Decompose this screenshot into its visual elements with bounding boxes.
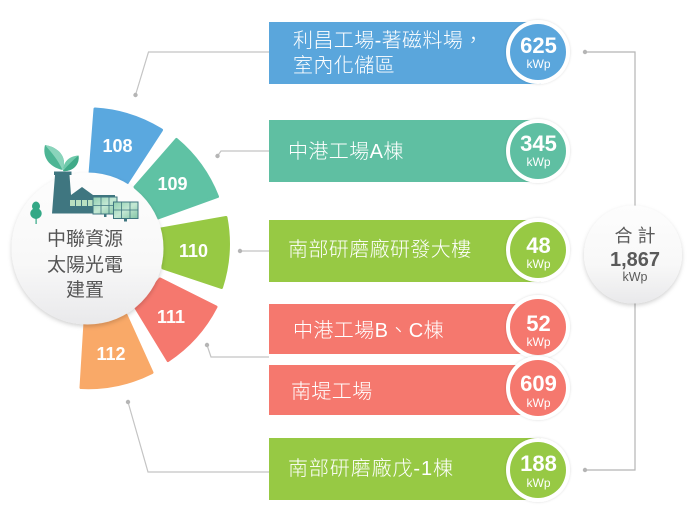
disc title: 建置: [66, 279, 104, 301]
segment: 111: [136, 279, 216, 360]
connector: 110 to bar 3: [238, 249, 269, 253]
badge: 609 kWp: kWp: [526, 396, 551, 410]
segment: 112: [81, 315, 152, 388]
segment: 108: [90, 109, 162, 183]
badge: 609 kWp: 609: [520, 371, 557, 396]
disc title: [47, 228, 123, 301]
badge: 52 kWp: [506, 295, 570, 359]
connector: 109 to bar 2: [215, 151, 269, 158]
segment: 110: [161, 218, 228, 288]
bar: 南堤工場: 南堤工場: [291, 380, 373, 403]
total circle: 合 計: [614, 226, 656, 246]
badge: 345 kWp: 345: [520, 131, 557, 156]
connector: bars to total: [583, 50, 635, 472]
disc title: 太陽光電: [47, 254, 123, 276]
badge: 625 kWp: kWp: [526, 57, 551, 71]
bar: 南部研磨廠戊-1棟: 南部研磨廠戊-1棟: [288, 457, 454, 480]
badge: 48 kWp: kWp: [526, 257, 551, 271]
bar: 南部研磨廠研發大樓: [269, 218, 570, 282]
badge: 625 kWp: 625: [520, 33, 557, 58]
total circle: 1,867: [610, 249, 660, 271]
segment: 109: 109: [157, 174, 188, 194]
segment: 111: 111: [157, 307, 185, 327]
bar: 中港工場A棟: 中港工場A棟: [288, 140, 404, 163]
bar: 中港工場B、C棟: [269, 295, 570, 359]
bar: 南部研磨廠戊-1棟: [269, 438, 570, 502]
icon: factory with leaves and solar panels: [30, 145, 138, 224]
center disc: [12, 145, 164, 324]
badge: 188 kWp: kWp: [526, 476, 551, 490]
bar: 南堤工場: [269, 356, 570, 420]
badge: 625 kWp: [506, 20, 570, 84]
badge: 188 kWp: 188: [520, 451, 557, 476]
bar: 利昌工場: [269, 20, 570, 84]
badge: 188 kWp: [506, 438, 570, 502]
bar: 利昌工場: 利昌工場-著磁料場，: [293, 29, 484, 52]
total circle: kWp: [622, 270, 648, 284]
connector: 112 to bar 6: [126, 400, 269, 472]
disc title: 中聯資源: [47, 228, 123, 250]
bar: 南部研磨廠研發大樓: 南部研磨廠研發大樓: [288, 238, 472, 261]
badge: 345 kWp: [506, 119, 570, 183]
total circle: [584, 206, 682, 304]
badge: 52 kWp: kWp: [526, 335, 551, 349]
bar: 利昌工場: 室內化儲區: [293, 54, 395, 77]
badge: 52 kWp: 52: [526, 311, 551, 336]
badge: 609 kWp: [506, 356, 570, 420]
segment: 110: 110: [179, 241, 208, 261]
badge: 345 kWp: kWp: [526, 155, 551, 169]
bar: 中港工場B、C棟: 中港工場B、C棟: [293, 319, 444, 342]
segment: 112: 112: [96, 344, 126, 364]
segment: 108: 108: [102, 136, 133, 156]
badge: 48 kWp: 48: [526, 233, 551, 258]
bar: 中港工場A棟: [269, 119, 570, 183]
connector: 108 to bar 1: [133, 52, 269, 97]
connector: 111 to bars 4 and 5: [205, 343, 269, 357]
badge: 48 kWp: [506, 218, 570, 282]
segment: 109: [135, 140, 218, 218]
